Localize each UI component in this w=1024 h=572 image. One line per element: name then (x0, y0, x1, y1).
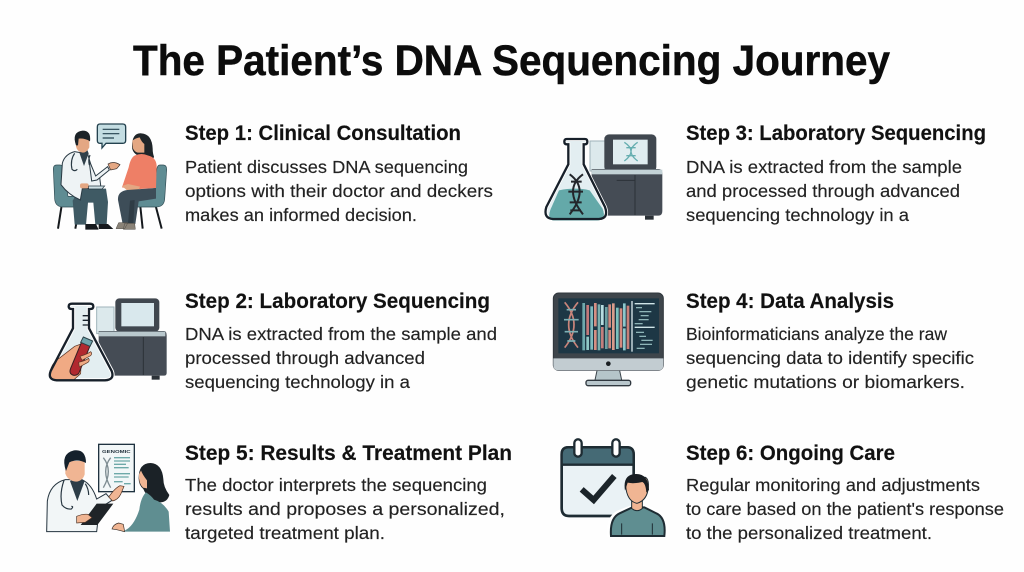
text: step 4 description: genetic mutations or biomarkers. (686, 372, 965, 392)
text: step 5 description: targeted treatment plan. (185, 523, 385, 543)
icon: doctor explaining genomic report to patient: GENOMIC (102, 449, 131, 455)
heading: step 6: Step 6: Ongoing Care (686, 442, 895, 465)
icon: doctor explaining genomic report to patient (47, 444, 170, 532)
heading: step 3: Step 3: Laboratory Sequencing (686, 122, 986, 145)
text: step 2 description: processed through advanced (185, 348, 425, 368)
text: step 1 description: makes an informed decision. (185, 205, 417, 225)
panel: step 1 (53, 122, 493, 230)
heading: step 5: Step 5: Results & Treatment Plan (185, 442, 512, 465)
icon: flask with blood sample and sequencer (50, 298, 167, 380)
icon: calendar with check mark and patient (562, 439, 668, 536)
text: step 3 description: DNA is extracted from the sample (686, 157, 962, 177)
text: step 6 description: to the personalized treatment. (686, 523, 932, 543)
panel: step 5 (47, 442, 512, 543)
text: step 2 description: sequencing technology in a (185, 372, 410, 392)
icon: DNA flask and sequencer (545, 134, 662, 220)
text: step 3 description: and processed through advanced (686, 181, 960, 201)
panel: step 6 (562, 439, 1004, 543)
text: step 5 description: results and proposes a personalized, (185, 499, 505, 519)
text: step 1 description: options with their doctor and deckers (185, 181, 493, 201)
title: The Patient’s DNA Sequencing Journey (133, 37, 890, 85)
text: step 3 description: sequencing technology in a (686, 205, 909, 225)
heading: step 1: Step 1: Clinical Consultation (185, 122, 461, 145)
text: step 5 description: The doctor interprets the sequencing (185, 475, 487, 495)
heading: step 2: Step 2: Laboratory Sequencing (185, 290, 490, 313)
panel: step 2 (50, 290, 497, 392)
text: step 4 description: Bioinformaticians analyze the raw (686, 324, 947, 344)
heading: step 4: Step 4: Data Analysis (686, 290, 894, 313)
panel: step 4 (553, 290, 974, 392)
icon: clinical consultation (53, 124, 167, 230)
panel: step 3 (545, 122, 986, 225)
text: step 6 description: Regular monitoring and adjustments (686, 475, 980, 495)
text: step 2 description: DNA is extracted from the sample and (185, 324, 497, 344)
text: step 4 description: sequencing data to identify specific (686, 348, 974, 368)
icon: computer monitor with DNA data (553, 293, 663, 386)
text: step 1 description: Patient discusses DNA sequencing (185, 157, 468, 177)
text: step 6 description: to care based on the patient's response (686, 499, 1004, 519)
